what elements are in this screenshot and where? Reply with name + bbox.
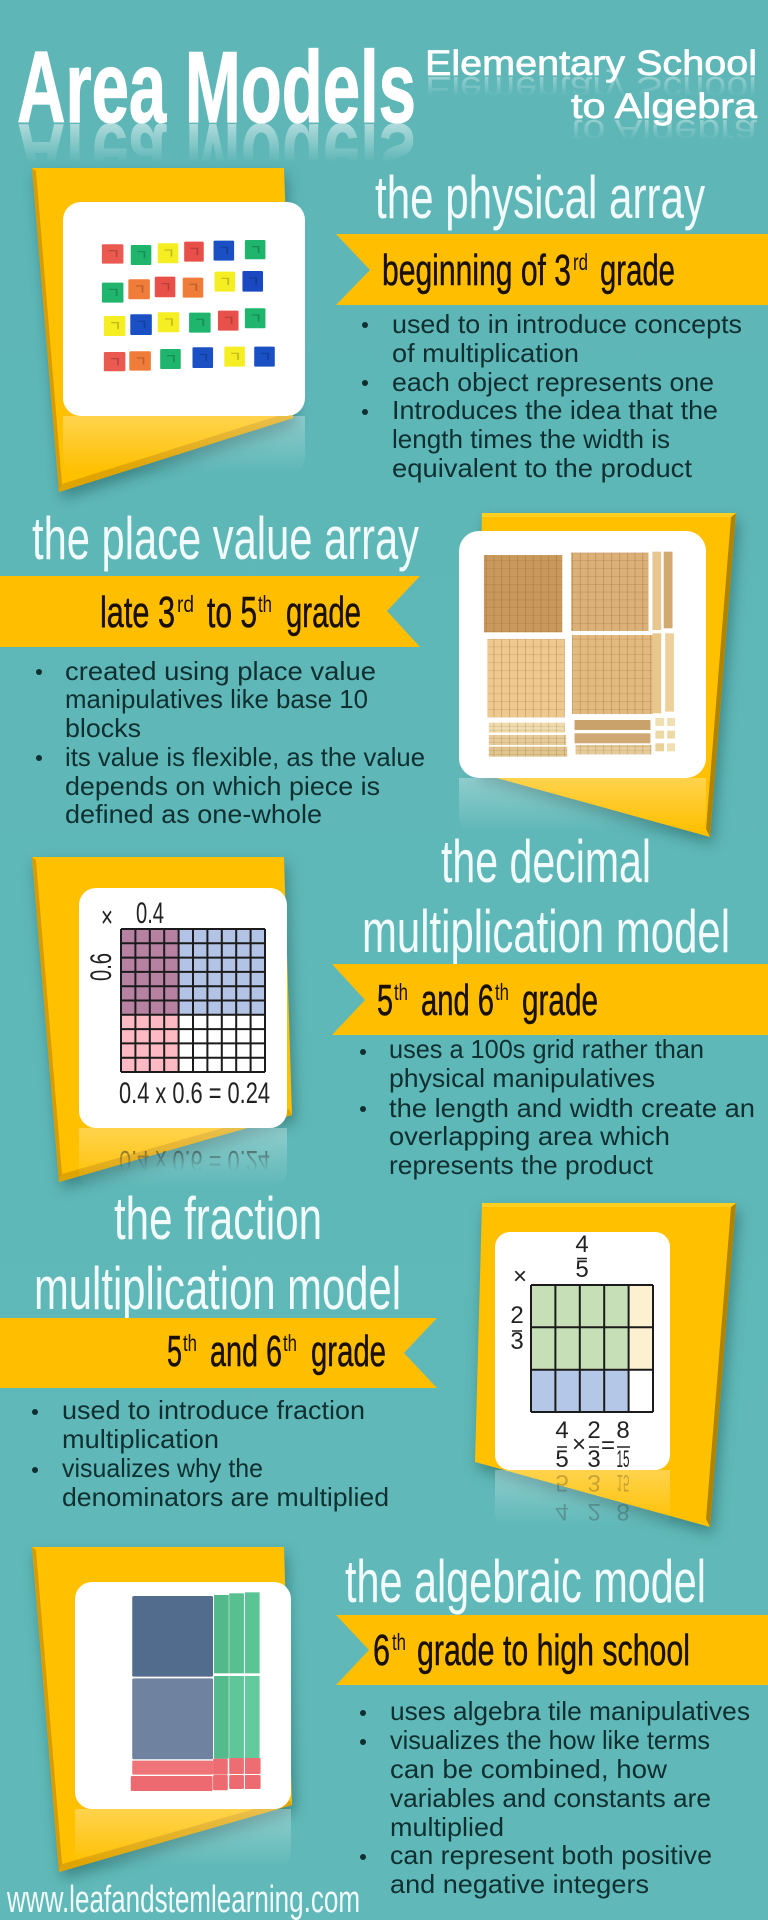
chart: fraction grid: [531, 1285, 653, 1412]
label: fraction 2/3: 3: [510, 1328, 524, 1355]
text block: physical array bullets: length times the width is: [392, 424, 670, 454]
text block: decimal bullets: the length and width create an: [389, 1093, 755, 1123]
label: fraction 4/5: 5: [575, 1256, 589, 1283]
title: Area Models: Area Models: [17, 32, 416, 144]
text block: decimal bullets: physical manipulatives: [389, 1063, 655, 1093]
icon: base ten blocks: [484, 552, 675, 757]
text block: place value bullets: manipulatives like base 10: [65, 684, 368, 714]
ribbon: 5th and 6th grade: 5: [167, 1327, 182, 1376]
heading: the decimal multiplication model: the decimal: [441, 828, 651, 895]
ribbon: beginning of 3rd grade: rd: [573, 249, 588, 275]
text block: algebraic bullets: uses algebra tile manipulatives: [390, 1696, 750, 1726]
text block: fraction bullets: [32, 1395, 389, 1512]
footer: website URL: www.leafandstemlearning.com: [6, 1879, 360, 1920]
text block: algebraic bullets: [360, 1696, 750, 1899]
text block: decimal bullets: [360, 1034, 755, 1180]
heading: the fraction multiplication model: multiplication model: [34, 1255, 401, 1322]
equation: 4/5 x 2/3 = 8/15: 3: [587, 1446, 601, 1473]
text block: place value bullets: depends on which piece is: [65, 771, 380, 801]
equation: 4/5 x 2/3 = 8/15: =: [601, 1432, 615, 1459]
equation: 4/5 x 2/3 = 8/15: [555, 1417, 630, 1473]
reflection: equation: 2: [587, 1498, 601, 1525]
text block: fraction bullets: multiplication: [62, 1424, 219, 1454]
ribbon: 6th grade to high school: 6: [373, 1626, 390, 1675]
text block: fraction bullets: denominators are multiplied: [62, 1482, 389, 1512]
label: multiply sign: ×: [513, 1263, 527, 1290]
reflection: equation: 4: [555, 1498, 569, 1525]
reflection: equation: 3: [587, 1469, 601, 1496]
label: fraction 2/3: 2: [510, 1302, 524, 1329]
ribbon: 5th and 6th grade: grade: [522, 976, 598, 1025]
text block: fraction bullets: visualizes why the: [62, 1453, 263, 1483]
heading: the place value array: the place value array: [32, 505, 419, 572]
reflection: equation: 5: [555, 1469, 569, 1496]
text block: physical array bullets: equivalent to the product: [392, 453, 693, 483]
label: multiply sign: ×: [101, 901, 113, 934]
ribbon: 5th and 6th grade: 5: [377, 976, 393, 1025]
ribbon: beginning of 3rd grade: [336, 234, 768, 305]
ribbon: 5th and 6th grade: grade: [311, 1327, 386, 1376]
ribbon: 5th and 6th grade: [332, 964, 768, 1035]
subtitle: Elementary School to Algebra: to Algebra: [571, 112, 758, 151]
ribbon: late 3rd to 5th grade: th: [258, 591, 272, 617]
text block: place value bullets: blocks: [65, 713, 141, 743]
text block: physical array bullets: [362, 309, 742, 483]
label: 0.4: 0.4: [136, 897, 164, 930]
text block: place value bullets: its value is flexible, as the value: [65, 742, 425, 772]
equation: 4/5 x 2/3 = 8/15: 2: [587, 1417, 601, 1444]
heading: the decimal multiplication model: [362, 828, 730, 965]
ribbon: 5th and 6th grade: th: [495, 979, 509, 1005]
equation: 4/5 x 2/3 = 8/15: 5: [555, 1446, 569, 1473]
ribbon: beginning of 3rd grade: grade: [600, 246, 675, 295]
equation: 4/5 x 2/3 = 8/15: ×: [572, 1431, 586, 1458]
text block: physical array bullets: of multiplication: [392, 338, 579, 368]
icon: coloured cubes array: [102, 240, 275, 371]
panel: physical array image: [32, 168, 305, 492]
ribbon: 5th and 6th grade: th: [283, 1330, 297, 1356]
subtitle: Elementary School to Algebra: Elementary School: [425, 69, 757, 108]
text block: algebraic bullets: can be combined, how: [390, 1754, 667, 1784]
panel: fraction multiplication image: 15: [616, 1469, 630, 1496]
text block: fraction bullets: used to introduce fraction: [62, 1395, 365, 1425]
label: fraction 2/3: [510, 1302, 524, 1355]
title: Area Models: Area Models: [17, 102, 416, 214]
text block: algebraic bullets: variables and constants are: [390, 1783, 711, 1813]
equation: 4/5 x 2/3 = 8/15: 4: [555, 1417, 569, 1444]
label: fraction 4/5: [575, 1231, 589, 1283]
ribbon: late 3rd to 5th grade: to 5: [207, 588, 257, 637]
text block: algebraic bullets: can represent both positive: [390, 1840, 712, 1870]
text block: decimal bullets: uses a 100s grid rather than: [389, 1034, 704, 1064]
subtitle: Elementary School to Algebra: [425, 44, 758, 151]
equation: 0.4 x 0.6 = 0.24: 0.4 x 0.6 = 0.24: [119, 1077, 270, 1110]
ribbon: 5th and 6th grade: th: [183, 1330, 197, 1356]
panel: algebraic model image: [32, 1547, 292, 1872]
reflection: equation: [555, 1469, 630, 1525]
text block: physical array bullets: Introduces the idea that the: [392, 395, 718, 425]
ribbon: 6th grade to high school: th: [392, 1629, 406, 1655]
reflection: equation: 0.4 x 0.6 = 0.24: [119, 1144, 270, 1177]
text block: physical array bullets: each object represents one: [392, 367, 714, 397]
text block: place value bullets: defined as one-whole: [65, 799, 322, 829]
equation: 4/5 x 2/3 = 8/15: 8: [616, 1417, 630, 1444]
ribbon: late 3rd to 5th grade: grade: [286, 588, 361, 637]
text block: decimal bullets: overlapping area which: [389, 1121, 670, 1151]
panel: decimal multiplication image: [32, 857, 292, 1186]
label: fraction 4/5: 4: [575, 1231, 589, 1258]
panel: fraction multiplication image: [475, 1203, 736, 1527]
ribbon: 5th and 6th grade: and 6: [421, 976, 494, 1025]
text block: algebraic bullets: visualizes the how like terms: [390, 1725, 710, 1755]
title: Area Models: [17, 32, 416, 214]
heading: the fraction multiplication model: [34, 1185, 401, 1322]
ribbon: late 3rd to 5th grade: late 3: [100, 588, 175, 637]
ribbon: late 3rd to 5th grade: [0, 576, 420, 647]
icon: algebra tiles: [131, 1592, 261, 1791]
equation: 4/5 x 2/3 = 8/15: 15: [616, 1446, 630, 1473]
heading: the fraction multiplication model: the fraction: [114, 1185, 322, 1252]
ribbon: late 3rd to 5th grade: rd: [177, 591, 194, 617]
text block: place value bullets: [36, 656, 425, 829]
ribbon: 5th and 6th grade: [0, 1318, 437, 1388]
panel: place value array image: [459, 513, 736, 837]
text block: place value bullets: created using place value: [65, 656, 376, 686]
ribbon: 5th and 6th grade: th: [394, 979, 408, 1005]
text block: algebraic bullets: multiplied: [390, 1812, 504, 1842]
reflection: equation: 8: [616, 1498, 630, 1525]
ribbon: beginning of 3rd grade: beginning of 3: [382, 246, 571, 295]
ribbon: 6th grade to high school: [336, 1615, 768, 1685]
text block: decimal bullets: represents the product: [389, 1150, 654, 1180]
text block: algebraic bullets: and negative integers: [390, 1869, 649, 1899]
label: 0.6: 0.6: [85, 953, 118, 981]
subtitle: Elementary School to Algebra: Elementary School: [425, 44, 757, 83]
text block: physical array bullets: used to in introduce concepts: [392, 309, 742, 339]
ribbon: 5th and 6th grade: and 6: [210, 1327, 282, 1376]
chart: 100s grid: [121, 929, 265, 1072]
subtitle: Elementary School to Algebra: to Algebra: [571, 87, 758, 126]
